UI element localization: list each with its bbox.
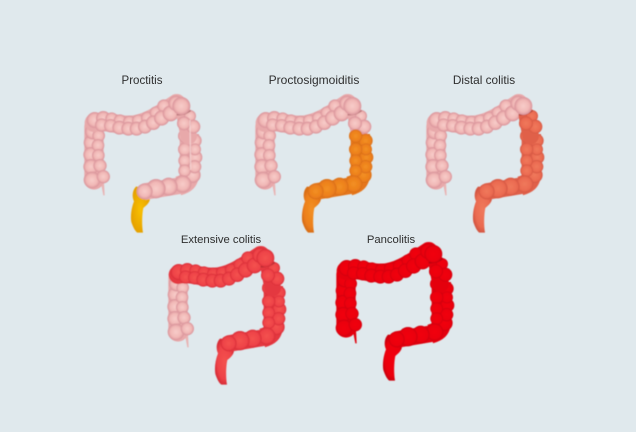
colon diagram: Extensive colitis <box>167 248 286 385</box>
title: Extensive colitis: Extensive colitis <box>181 234 262 246</box>
colon diagram: Proctosigmoiditis <box>254 96 373 233</box>
title: Proctosigmoiditis: Proctosigmoiditis <box>269 73 359 87</box>
title: Pancolitis: Pancolitis <box>367 234 416 246</box>
title: Distal colitis: Distal colitis <box>453 73 515 87</box>
colon diagram: Proctitis <box>83 96 202 233</box>
colon diagram: Pancolitis <box>335 244 454 381</box>
colon diagram: Distal colitis <box>425 96 544 233</box>
title: Proctitis: Proctitis <box>122 75 163 87</box>
